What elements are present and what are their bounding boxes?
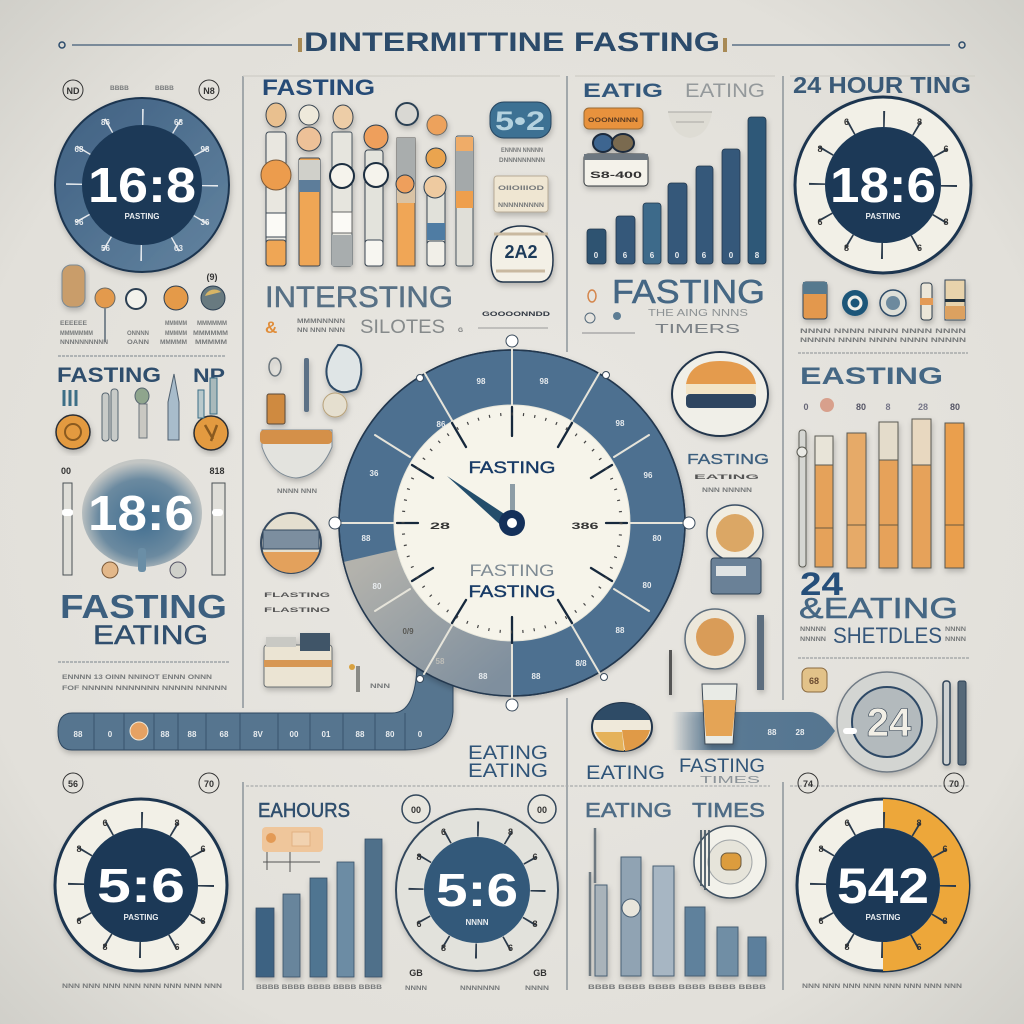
column 3	[330, 105, 354, 266]
clock corner labels right	[798, 773, 964, 793]
clock 16:8: 86	[101, 118, 110, 127]
clock 5:6 left: 8	[102, 942, 108, 952]
eating eating label: EATING	[468, 761, 548, 782]
bar chart eating value glyphs: 6	[702, 251, 707, 260]
tag and card: OOONNNNN	[588, 117, 638, 124]
food icons left of dial	[260, 345, 361, 478]
clock corner labels left: 70	[204, 779, 214, 789]
ring labels: 86	[437, 420, 446, 429]
badge 5:2	[490, 102, 551, 138]
heading: 24 and eating schedules: NNNNN	[800, 626, 826, 633]
ring labels: 88	[616, 626, 625, 635]
right small badge: 68	[809, 676, 819, 686]
clock 16:8: 96	[75, 218, 84, 227]
clock 18:6: PASTING	[866, 212, 900, 221]
heading: interesting: MMMNNNNN	[297, 318, 345, 325]
bar chart times	[590, 828, 766, 976]
small icons row: 80	[950, 402, 960, 412]
heading: eating eating	[583, 81, 765, 102]
heading: 24 and eating schedules: NNNNN	[800, 636, 826, 643]
labels flasting: FLASTINO	[264, 607, 330, 614]
eating fasting label: EATING	[586, 763, 665, 784]
bar chart eating value glyphs: 6	[650, 251, 655, 260]
clock 5:6 left: 6	[102, 818, 108, 828]
eating fasting label: FASTING	[679, 756, 765, 777]
note 5:2: DNNNNNNNNN	[499, 157, 545, 164]
label card: OIIOIIIOD	[498, 185, 544, 192]
left icons row: MMMMM	[195, 339, 227, 346]
ring labels: 98	[540, 377, 549, 386]
heading: fasting mid-right	[582, 273, 765, 336]
clock blob 18:6: 818	[209, 466, 225, 476]
label card: NNNNNNNNN	[498, 202, 544, 209]
left caption: ENNNN 13 OINN NNINOT ENNN ONNN	[62, 674, 212, 681]
ring labels: 80	[653, 534, 662, 543]
small bottle icon	[349, 664, 390, 692]
clock 18:6: 8	[817, 144, 823, 154]
ring labels: 0/9	[402, 627, 414, 636]
labels flasting	[264, 592, 330, 614]
heading: fasting eating: EATING	[93, 620, 208, 650]
ring labels: 88	[362, 534, 371, 543]
bar chart orange	[797, 419, 964, 568]
bar chart hours	[256, 839, 382, 977]
central dial: 386	[572, 521, 598, 531]
clock 5:6 middle: NNNN	[465, 918, 489, 927]
spoke end knobs	[329, 335, 695, 711]
column 7	[456, 136, 473, 266]
heading: fasting eating right: EATING	[694, 474, 759, 481]
heading: interesting: SILOTES	[360, 317, 445, 338]
clock 16:8: 56	[101, 244, 110, 253]
clock 5:6 middle corner labels: NNNN	[525, 985, 549, 992]
clock 18:6: 8	[943, 217, 949, 227]
clock 5:6 left: 8	[174, 818, 180, 828]
heading: fasting eating: FASTING	[60, 588, 227, 625]
clock 18:6: 18:6	[830, 159, 936, 213]
heading: 24 and eating schedules: SHETDLES	[833, 623, 942, 648]
right small badge	[802, 668, 827, 692]
clock 5:6 left: 6	[200, 844, 206, 854]
icons: cutlery and coins	[56, 374, 228, 450]
clock 5:6 middle: 8	[441, 943, 446, 953]
clock 18:6: 8	[917, 117, 922, 127]
clock 5:6 middle corner labels	[402, 795, 556, 992]
bar chart eating	[587, 117, 766, 264]
heading: 24 hour: 24 HOUR TING	[793, 72, 971, 98]
clock corner labels: ND	[66, 86, 80, 96]
icon: plate with bun	[669, 609, 764, 695]
clock 16:8: 36	[201, 218, 210, 227]
clock 5:6 left: 6	[174, 942, 180, 952]
ring labels: 88	[532, 672, 541, 681]
gray segment	[370, 556, 512, 669]
clock 5:6 middle: 8	[416, 852, 422, 862]
bar chart eating value glyphs: 8	[755, 251, 760, 260]
clock 542: 542	[837, 858, 929, 914]
faint bowl sketch	[668, 112, 712, 138]
clock corner labels: BBBB	[155, 85, 174, 92]
clock corner labels right: 70	[949, 779, 959, 789]
small icons row: 0	[803, 402, 809, 412]
left icons row: MMMMMM	[193, 330, 228, 337]
column 1	[261, 103, 291, 266]
note 5:2	[499, 147, 545, 164]
connector bar left: 68	[220, 730, 229, 739]
dial hands	[447, 476, 512, 530]
tag and card: S8-400	[590, 170, 642, 180]
clock corner labels	[63, 80, 219, 100]
clock 16:8: 68	[174, 118, 183, 127]
clock 5:6 middle corner labels: GB	[409, 968, 423, 978]
clock 5:6 middle corner labels: NNNN	[405, 985, 427, 992]
bar chart times labels: BBBB BBBB BBBB BBBB BBBB BBBB	[588, 984, 766, 991]
clock 5:6 left: 8	[200, 916, 206, 926]
clock 5:6 middle corner labels: 00	[411, 805, 421, 815]
minor ticks	[403, 414, 621, 632]
caption right	[800, 328, 966, 344]
label card	[494, 176, 548, 212]
clock 18:6: 8	[844, 243, 849, 253]
clock corner labels: BBBB	[110, 85, 129, 92]
connector bar left: 0	[418, 730, 423, 739]
heading: fasting mid-right: FASTING	[612, 273, 765, 310]
bar chart eating value glyphs: 0	[675, 251, 680, 260]
clock 5:6 middle: 6	[441, 827, 446, 837]
heading: fasting eating right: FASTING	[687, 451, 769, 468]
left icons row: ONNNN	[127, 330, 149, 337]
clock 542: 8	[844, 942, 850, 952]
connector bar left: 88	[161, 730, 170, 739]
labels flasting: FLASTING	[264, 592, 330, 599]
badge 5:2: 5•2	[495, 106, 545, 136]
heading: fasting eating	[60, 588, 227, 650]
heading: eahours: EAHOURS	[258, 800, 350, 822]
central dial	[329, 335, 695, 711]
spokes	[330, 340, 694, 706]
gauge icon	[261, 513, 321, 573]
clock 18:6: 6	[817, 217, 823, 227]
caption right: NNNNN NNNN NNNN NNNN NNNNN	[800, 337, 966, 344]
heading: fasting left: FASTING	[57, 364, 161, 387]
ring labels: 8/8	[575, 659, 587, 668]
left caption: FOF NNNNN NNNNNNN NNNNN NNNNN	[62, 685, 227, 692]
small icons row: 80	[856, 402, 866, 412]
bar chart eating value glyphs: 0	[594, 251, 599, 260]
heading: fasting left	[57, 364, 225, 387]
clock 542: 6	[942, 844, 948, 854]
heading: eating eating: EATIG	[583, 81, 663, 102]
left icons row: MMMMM	[165, 330, 187, 337]
heading: fasting left: NP	[193, 366, 225, 387]
icon: pie dish	[707, 505, 763, 594]
small icons row	[803, 398, 960, 412]
heading: interesting: &	[265, 318, 277, 337]
column 5	[396, 103, 418, 266]
eating eating label	[468, 743, 548, 782]
left icons row: EEEEEE	[60, 320, 88, 327]
heading: interesting	[265, 281, 550, 338]
heading: eating times	[585, 800, 765, 822]
clock 16:8: 16:8	[88, 159, 196, 213]
heading: interesting: INTERSTING	[265, 281, 453, 314]
clock 16:8	[55, 98, 229, 272]
clock 5:6 middle: 6	[416, 919, 422, 929]
clock corner labels right: 74	[803, 779, 813, 789]
heading: fasting eating right: NNN NNNNN	[702, 487, 752, 494]
title: DINTERMITTINE FASTING	[304, 27, 720, 57]
heading: interesting: GOOOONNDD	[482, 311, 550, 318]
heading: fasting mid-right: THE AING NNNS	[648, 308, 748, 319]
clock 18:6: 6	[943, 144, 949, 154]
caption right: NNNN NNNN NNNN NNNN NNNN	[800, 328, 966, 335]
ring labels	[362, 377, 662, 681]
small bottle icon: NNN	[370, 683, 390, 690]
ring labels: 58	[436, 657, 445, 666]
connector bar left: 00	[290, 730, 299, 739]
major ticks	[397, 407, 627, 643]
connector bar left: 88	[188, 730, 197, 739]
clock 5:6 middle corner labels: NNNNNNN	[460, 985, 500, 992]
clock 16:8: 63	[174, 244, 183, 253]
title	[59, 27, 965, 57]
clock 5:6 left: PASTING	[124, 913, 158, 922]
clock corner labels: N8	[203, 86, 215, 96]
heading: eating times: EATING	[585, 800, 672, 822]
ring labels: 88	[479, 672, 488, 681]
clock 16:8: PASTING	[125, 212, 159, 221]
column 4	[364, 125, 388, 266]
heading: interesting: NN NNN NNN	[297, 327, 345, 334]
clock 542: 6	[818, 916, 824, 926]
heading: 24 and eating schedules: &EATING	[799, 593, 958, 625]
clock 5:6 left: 8	[76, 844, 82, 854]
clock 5:6 middle: 8	[532, 919, 538, 929]
left icons row: NNNNNNNNNN	[60, 339, 108, 346]
clock 5:6 middle: 6	[532, 852, 538, 862]
connector bar left	[58, 664, 453, 750]
left icons row: MMMMMM	[197, 320, 227, 327]
clock corner labels left	[63, 773, 219, 793]
connector bar left: 0	[108, 730, 113, 739]
clock 542: 6	[916, 942, 922, 952]
bar chart eating value glyphs	[594, 251, 760, 260]
ring labels: 96	[644, 471, 653, 480]
card 2A2	[491, 226, 553, 282]
clock 5:6 left	[55, 799, 227, 971]
column 2	[297, 105, 321, 266]
tag and card	[584, 108, 648, 186]
clock 5:6 left: 6	[76, 916, 82, 926]
central dial: FASTING	[470, 561, 554, 580]
note 5:2: ENNNN NNNNN	[501, 147, 543, 154]
left icons row: (9)	[206, 272, 218, 282]
connector bar left: 01	[322, 730, 331, 739]
connector bar left: 80	[386, 730, 395, 739]
ring labels: 80	[643, 581, 652, 590]
left caption	[62, 674, 227, 692]
bar columns fasting	[261, 103, 473, 266]
clock 18:6: 6	[917, 243, 922, 253]
heading: eating eating: EATING	[685, 81, 765, 102]
clock blob 18:6: 18:6	[88, 487, 194, 541]
clock 5:6 middle	[396, 809, 558, 971]
bottom left caption: NNN NNN NNN NNN NNN NNN NNN NNN	[62, 983, 222, 990]
heading: 24 and eating schedules: 24	[800, 566, 843, 602]
ring labels: 80	[373, 582, 382, 591]
burger plate	[672, 352, 768, 436]
bar chart hours labels: BBBB BBBB BBBB BBBB BBBB	[256, 984, 382, 991]
ring labels: 98	[477, 377, 486, 386]
connector bar right: 88	[768, 728, 777, 737]
eating fasting label	[586, 756, 765, 786]
clock 18:6	[795, 97, 971, 273]
small icons row: 8	[885, 402, 891, 412]
clock corner labels left: 56	[68, 779, 78, 789]
note orange tag	[262, 827, 323, 872]
stack icon	[264, 633, 332, 687]
ring labels: 36	[370, 469, 379, 478]
small icons row: 28	[918, 402, 928, 412]
clock 18:6: 6	[844, 117, 849, 127]
central dial: 28	[430, 521, 450, 531]
eating eating label: EATING	[468, 743, 548, 764]
heading: easting: EASTING	[800, 363, 943, 390]
clock 5:6 middle: 5:6	[436, 864, 518, 916]
left icons row: MMMMM	[160, 339, 187, 346]
dial labels: FASTING	[468, 458, 556, 477]
connector bar left: 8V	[253, 730, 264, 739]
clock 542: 8	[942, 916, 948, 926]
connector bar right: 28	[796, 728, 805, 737]
left icons row: MMMMM	[165, 320, 187, 327]
left icons row: MMMMMMM	[60, 330, 93, 337]
heading: fasting middle: FASTING	[262, 75, 375, 100]
clock blob 18:6: 00	[61, 466, 71, 476]
clock 5:6 middle: 8	[508, 827, 513, 837]
heading: 24 and eating schedules: NNNN	[945, 626, 966, 633]
heading: 24 and eating schedules: NNNN	[945, 636, 966, 643]
heading: interesting: G	[458, 327, 463, 334]
heading: eating times: TIMES	[692, 800, 765, 822]
plate icon	[694, 826, 766, 898]
clock 542: PASTING	[866, 913, 900, 922]
gauge 24: 24	[867, 701, 912, 745]
clock 542	[797, 799, 969, 971]
eating fasting label: TIMES	[700, 775, 761, 786]
clock 5:6 left: 5:6	[97, 860, 185, 913]
clock 542: 6	[844, 818, 850, 828]
gauge 24	[837, 672, 966, 772]
central dial: FASTING	[468, 582, 556, 601]
heading: 24 and eating schedules	[799, 566, 966, 648]
connector bar right	[672, 712, 835, 750]
left icons row: OANN	[127, 339, 149, 346]
clock 5:6 middle corner labels: GB	[533, 968, 547, 978]
heading: fasting mid-right: TIMERS	[655, 321, 741, 336]
bar chart eating value glyphs: 0	[729, 251, 734, 260]
icons row right	[803, 280, 965, 320]
clock blob 18:6	[61, 459, 225, 578]
clock 542: 8	[818, 844, 824, 854]
card 2A2: 2A2	[504, 242, 538, 262]
clock 542: 8	[916, 818, 922, 828]
ring labels: 98	[616, 419, 625, 428]
caption left of dial: NNNN NNN	[277, 488, 317, 495]
clock 5:6 middle: 6	[508, 943, 513, 953]
clock 16:8: 68	[75, 145, 84, 154]
connector bar left: 88	[356, 730, 365, 739]
food and drink icons	[592, 684, 737, 751]
clock 16:8: 98	[201, 145, 210, 154]
clock 5:6 middle corner labels: 00	[537, 805, 547, 815]
bar chart eating value glyphs: 6	[623, 251, 628, 260]
left icons row	[60, 265, 228, 346]
bottom right caption: NNN NNN NNN NNN NNN NNN NNN NNN	[802, 983, 962, 990]
panel dividers	[243, 76, 975, 990]
connector bar left: 88	[74, 730, 83, 739]
heading: fasting eating right	[687, 451, 769, 494]
column 6	[424, 115, 447, 266]
